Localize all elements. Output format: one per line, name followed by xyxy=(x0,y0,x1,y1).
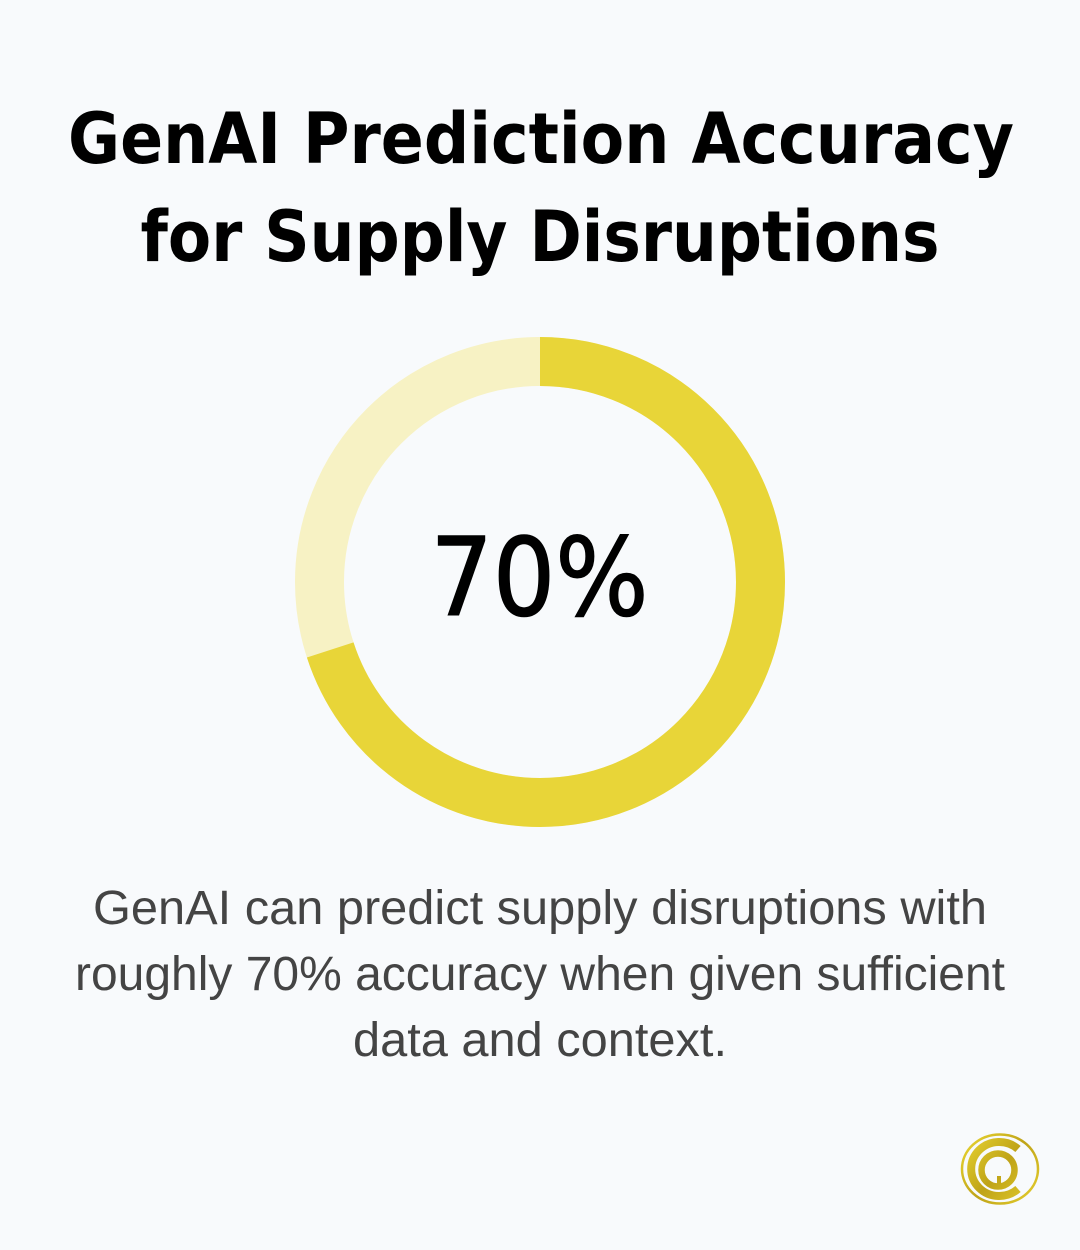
description text: data and context. xyxy=(353,1014,727,1067)
title: for Supply Disruptions xyxy=(140,196,940,278)
center value: 70% xyxy=(430,516,648,641)
title xyxy=(68,98,1014,278)
icon: logo xyxy=(962,1134,1038,1204)
description text: GenAI can predict supply disruptions with xyxy=(93,882,987,935)
donut chart: 70% xyxy=(320,362,760,802)
description text xyxy=(75,882,1005,1067)
description text: roughly 70% accuracy when given sufficient xyxy=(75,948,1005,1001)
